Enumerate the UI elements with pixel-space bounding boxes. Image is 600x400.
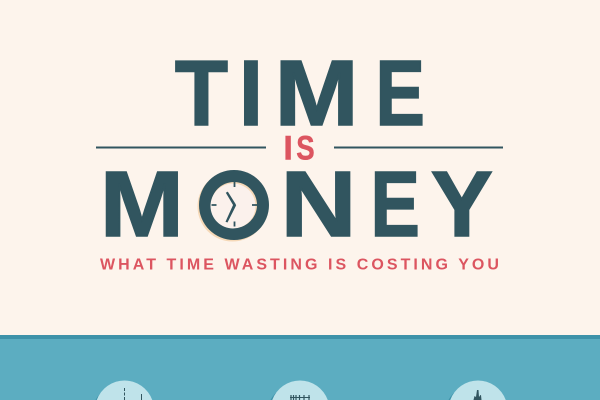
title: TIME: E (376, 41, 425, 145)
title: MONEY: O (198, 153, 270, 257)
panel: teal band (0, 335, 600, 400)
icon: circle 3 with spire (448, 381, 506, 400)
title: MONEY: N (280, 152, 357, 256)
divider line: left (96, 146, 266, 148)
title: TIME (175, 41, 425, 146)
heading: IS (283, 129, 315, 168)
title: TIME: T (175, 43, 228, 146)
title: TIME: M (275, 41, 359, 145)
divider line: right (334, 146, 503, 148)
heading: IS: I (283, 130, 293, 168)
subtitle: WHAT TIME WASTING IS COSTING YOU (100, 256, 499, 274)
title: MONEY (100, 152, 493, 257)
icon: circle 1 with clock ticks (96, 381, 152, 400)
title: MONEY: Y (431, 152, 493, 256)
icon: clock (198, 170, 269, 242)
heading: IS: S (296, 129, 315, 167)
icon: circle 2 with fence (270, 381, 328, 400)
title: MONEY: M (100, 152, 184, 256)
title: TIME: I (239, 41, 263, 145)
title: MONEY: E (370, 152, 420, 256)
